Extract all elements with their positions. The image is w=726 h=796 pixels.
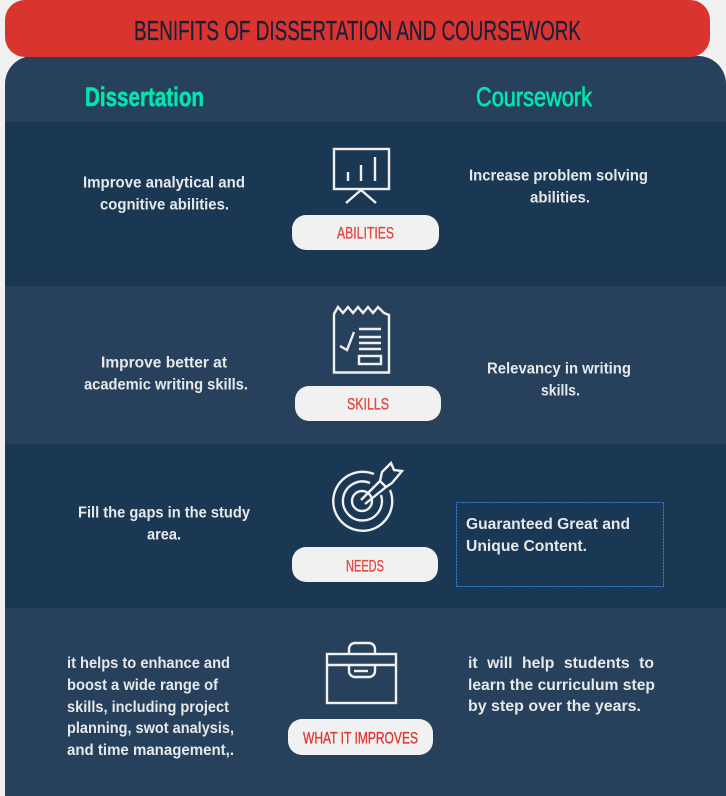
row 4 right text: learn the curriculum step (468, 677, 655, 694)
title banner (5, 0, 710, 57)
row 1 right text: Increase problem solving (469, 168, 648, 184)
row 2 right text: skills. (541, 382, 580, 400)
icon: presentation board (334, 149, 389, 203)
icon: target with dart (333, 463, 402, 531)
pill: what it improves: WHAT IT IMPROVES (303, 728, 418, 748)
pill: skills (295, 386, 441, 421)
row 1 left text (83, 174, 245, 214)
pill: needs (292, 547, 438, 582)
row 4 right text: by step over the years. (468, 698, 641, 715)
row 3 left text: area. (147, 526, 181, 544)
row 2 left text (84, 354, 248, 394)
row 2 right text (487, 360, 631, 400)
row 2 left text: Improve better at (101, 354, 227, 372)
heading: Coursework: Coursework (476, 82, 592, 112)
row 2 right text: Relevancy in writing (487, 360, 631, 378)
row 4 left text: boost a wide range of (67, 677, 219, 694)
row 4 left text (67, 655, 234, 759)
row 1 right text: abilities. (530, 190, 590, 206)
pill: abilities: ABILITIES (337, 224, 394, 242)
row 4 left text: and time management,. (67, 742, 234, 759)
pill: needs: NEEDS (346, 556, 384, 576)
pill: skills: SKILLS (347, 394, 389, 414)
heading: Dissertation: Dissertation (85, 82, 204, 112)
row 1 left text: Improve analytical and (83, 174, 245, 192)
row 3 right selected text box (456, 502, 664, 586)
row 3 right selected text box: Unique Content. (466, 538, 587, 555)
icon: checklist receipt (334, 307, 389, 372)
pill: what it improves (288, 719, 433, 755)
row 1 left text: cognitive abilities. (100, 196, 229, 214)
icon: briefcase (327, 643, 396, 703)
row 1 right text (469, 168, 648, 206)
row 3 left text (78, 504, 250, 544)
row 3 right selected text box: Guaranteed Great and (466, 516, 630, 533)
row 2 left text: academic writing skills. (84, 376, 248, 394)
row 4 left text: it helps to enhance and (67, 655, 230, 672)
row 3 left text: Fill the gaps in the study (78, 504, 250, 522)
pill: abilities (292, 215, 439, 250)
row 4 left text: planning, swot analysis, (67, 720, 234, 737)
row 4 right text (468, 655, 655, 715)
row 4 left text: skills, including project (67, 699, 229, 716)
row 4 right text: it will help students to (468, 655, 654, 672)
